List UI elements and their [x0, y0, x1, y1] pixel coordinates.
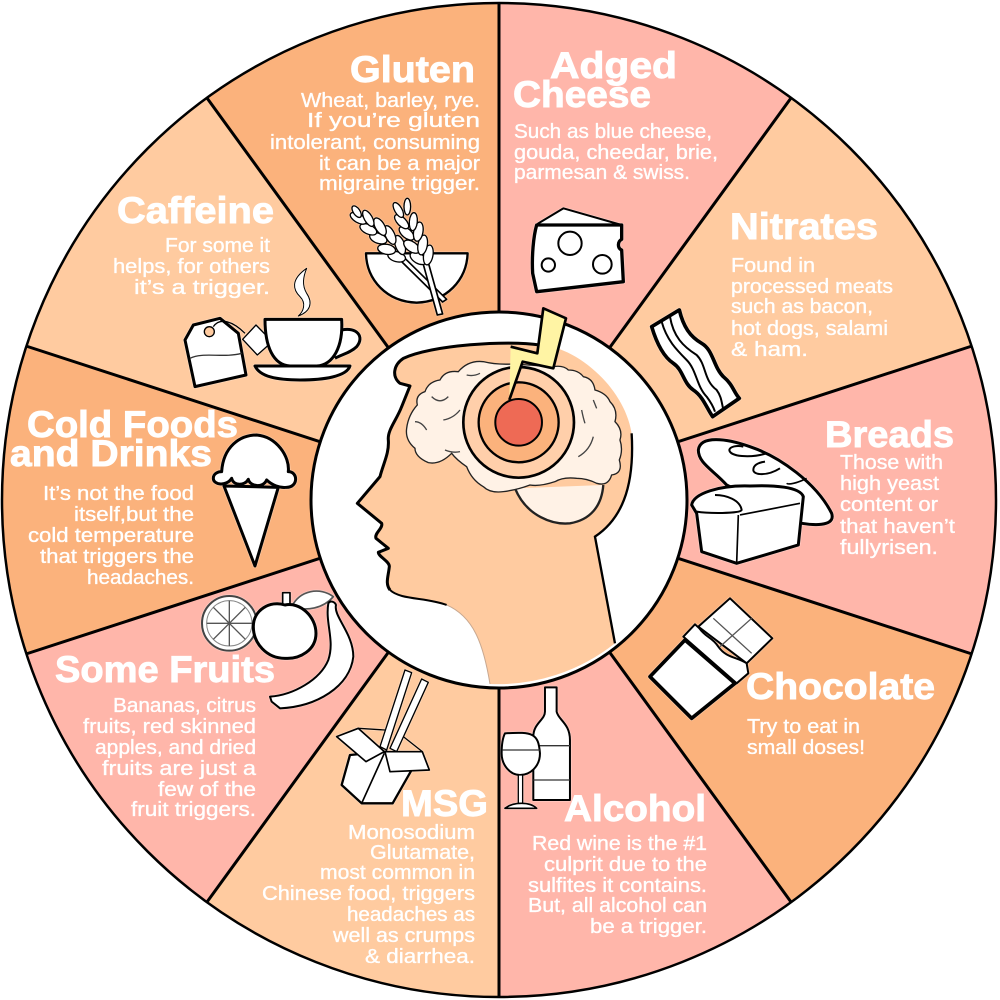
- text: chocolate description: [747, 716, 865, 759]
- head silhouette: [357, 343, 633, 684]
- text: breads description: fullyrisen.: [840, 537, 938, 559]
- panel: caffeine: [26, 98, 499, 500]
- icon: ice cream: [213, 435, 296, 566]
- heading: cold foods and drinks: and Drinks: [10, 433, 212, 474]
- text: msg description: Glutamate,: [370, 842, 475, 864]
- icon: takeout box: [337, 670, 429, 803]
- text: fruits description: few of the: [158, 779, 256, 801]
- text: alcohol description: be a trigger.: [590, 916, 707, 938]
- panel: chocolate: [499, 500, 972, 902]
- icon: chocolate: [650, 598, 772, 718]
- brain: [406, 361, 621, 524]
- text: gluten description: it can be a major: [319, 153, 480, 175]
- heading: breads: Breads: [825, 414, 954, 455]
- text: nitrates description: [731, 255, 893, 361]
- panel: adged cheese: [499, 3, 791, 500]
- heading: cold foods and drinks: Cold Foods: [27, 404, 238, 445]
- icon: lightning bolt: [509, 308, 566, 400]
- icon: tea and cup: [185, 268, 360, 387]
- text: alcohol description: culprit due to the: [544, 854, 707, 876]
- text: nitrates description: & ham.: [731, 339, 808, 361]
- text: fruits description: [83, 695, 257, 821]
- text: nitrates description: processed meats: [731, 276, 893, 298]
- text: nitrates description: such as bacon,: [731, 296, 873, 318]
- heading: cold foods and drinks: [10, 404, 238, 474]
- panel: msg: [207, 500, 499, 997]
- icon: wheat bowl: [348, 198, 468, 315]
- heading: alcohol: Alcohol: [564, 788, 706, 829]
- icon: cheese: [532, 208, 623, 292]
- text: cold foods description: headaches.: [87, 567, 194, 589]
- text: breads description: content or: [840, 494, 938, 516]
- text: breads description: high yeast: [840, 473, 939, 495]
- text: alcohol description: But, all alcohol can: [528, 895, 707, 917]
- icon: breads: [692, 440, 832, 563]
- panel: cold foods and drinks: [2, 346, 499, 654]
- text: msg description: most common in: [320, 862, 475, 884]
- panel: center head illustration: [311, 308, 687, 688]
- text: fruits description: fruit triggers.: [131, 799, 256, 821]
- text: fruits description: fruits, red skinned: [83, 716, 256, 738]
- heading: nitrates: Nitrates: [730, 206, 878, 247]
- text: msg description: & diarrhea.: [365, 946, 475, 968]
- heading: adged cheese: [513, 45, 677, 115]
- heading: caffeine: Caffeine: [117, 190, 274, 231]
- panel: alcohol: [499, 500, 791, 997]
- text: fruits description: fruits are just a: [102, 758, 257, 780]
- text: gluten description: [270, 90, 480, 195]
- text: caffeine description: helps, for others: [113, 256, 270, 278]
- text: msg description: well as crumps: [332, 925, 475, 947]
- text: fruits description: Bananas, citrus: [113, 695, 256, 717]
- text: gluten description: If you’re gluten: [307, 110, 480, 132]
- text: caffeine description: [113, 235, 270, 299]
- text: nitrates description: Found in: [731, 255, 815, 277]
- text: fruits description: apples, and dried: [95, 737, 256, 759]
- text: msg description: Chinese food, triggers: [262, 883, 475, 905]
- text: cold foods description: that triggers the: [40, 546, 194, 568]
- heading: adged cheese: Adged: [550, 45, 677, 86]
- text: cheese description: [514, 121, 718, 184]
- text: gluten description: migraine trigger.: [319, 173, 480, 195]
- text: alcohol description: Red wine is the #1: [532, 833, 707, 855]
- icon: fruits: [202, 591, 353, 708]
- heading: chocolate: Chocolate: [746, 666, 935, 707]
- text: caffeine description: For some it: [165, 235, 270, 257]
- panel: some fruits: [26, 500, 499, 902]
- text: cold foods description: It’s not the food: [43, 483, 194, 505]
- text: gluten description: Wheat, barley, rye.: [301, 90, 480, 112]
- text: chocolate description: Try to eat in: [747, 716, 860, 738]
- text: msg description: [262, 822, 475, 968]
- text: alcohol description: [528, 833, 707, 938]
- heading: some fruits: Some Fruits: [55, 649, 275, 690]
- heading: adged cheese: Cheese: [513, 74, 651, 115]
- text: cheese description: gouda, cheedar, brie,: [514, 142, 718, 164]
- target circles: [463, 367, 574, 478]
- text: msg description: Monosodium: [348, 822, 475, 844]
- text: alcohol description: sulfites it contains.: [528, 875, 707, 897]
- text: chocolate description: small doses!: [747, 737, 865, 759]
- panel: nitrates: [499, 98, 972, 500]
- heading: msg: MSG: [401, 783, 488, 824]
- text: cold foods description: itself,but the: [74, 504, 194, 526]
- icon: wine bottle and glass: [502, 687, 570, 808]
- text: gluten description: intolerant, consuming: [270, 132, 480, 154]
- text: breads description: Those with: [840, 452, 943, 474]
- text: cold foods description: cold temperature: [28, 525, 194, 547]
- panel: breads: [499, 346, 996, 654]
- text: msg description: headaches as: [347, 904, 475, 926]
- text: cheese description: Such as blue cheese,: [514, 121, 712, 143]
- text: cold foods description: [28, 483, 194, 589]
- text: cheese description: parmesan & swiss.: [514, 162, 690, 184]
- panel: gluten: [206, 3, 499, 500]
- text: caffeine description: it’s a trigger.: [134, 277, 270, 299]
- icon: bacon: [652, 310, 739, 417]
- heading: gluten: Gluten: [350, 49, 475, 90]
- text: breads description: [840, 452, 955, 559]
- text: nitrates description: hot dogs, salami: [731, 318, 888, 340]
- text: breads description: that haven’t: [840, 516, 955, 538]
